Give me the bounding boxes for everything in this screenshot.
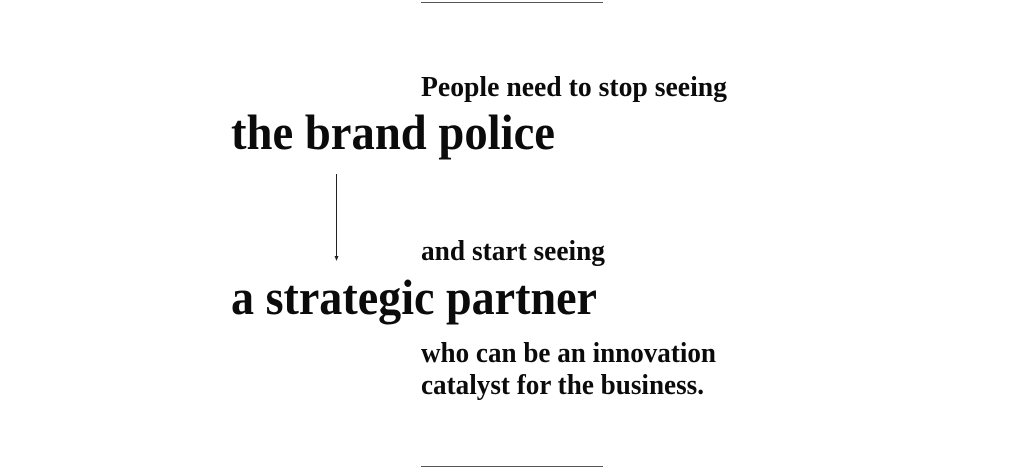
heading: a strategic partner: a strategic partner xyxy=(231,269,597,325)
closing text: catalyst for the business. xyxy=(421,370,704,401)
bottom rule xyxy=(421,466,603,467)
transition text: and start seeing xyxy=(421,236,605,267)
heading: the brand police: the brand police xyxy=(231,104,555,160)
intro text: People need to stop seeing xyxy=(421,72,727,103)
closing text xyxy=(421,338,716,401)
top rule xyxy=(421,2,603,3)
arrow: down xyxy=(334,174,338,261)
closing text: who can be an innovation xyxy=(421,338,716,369)
